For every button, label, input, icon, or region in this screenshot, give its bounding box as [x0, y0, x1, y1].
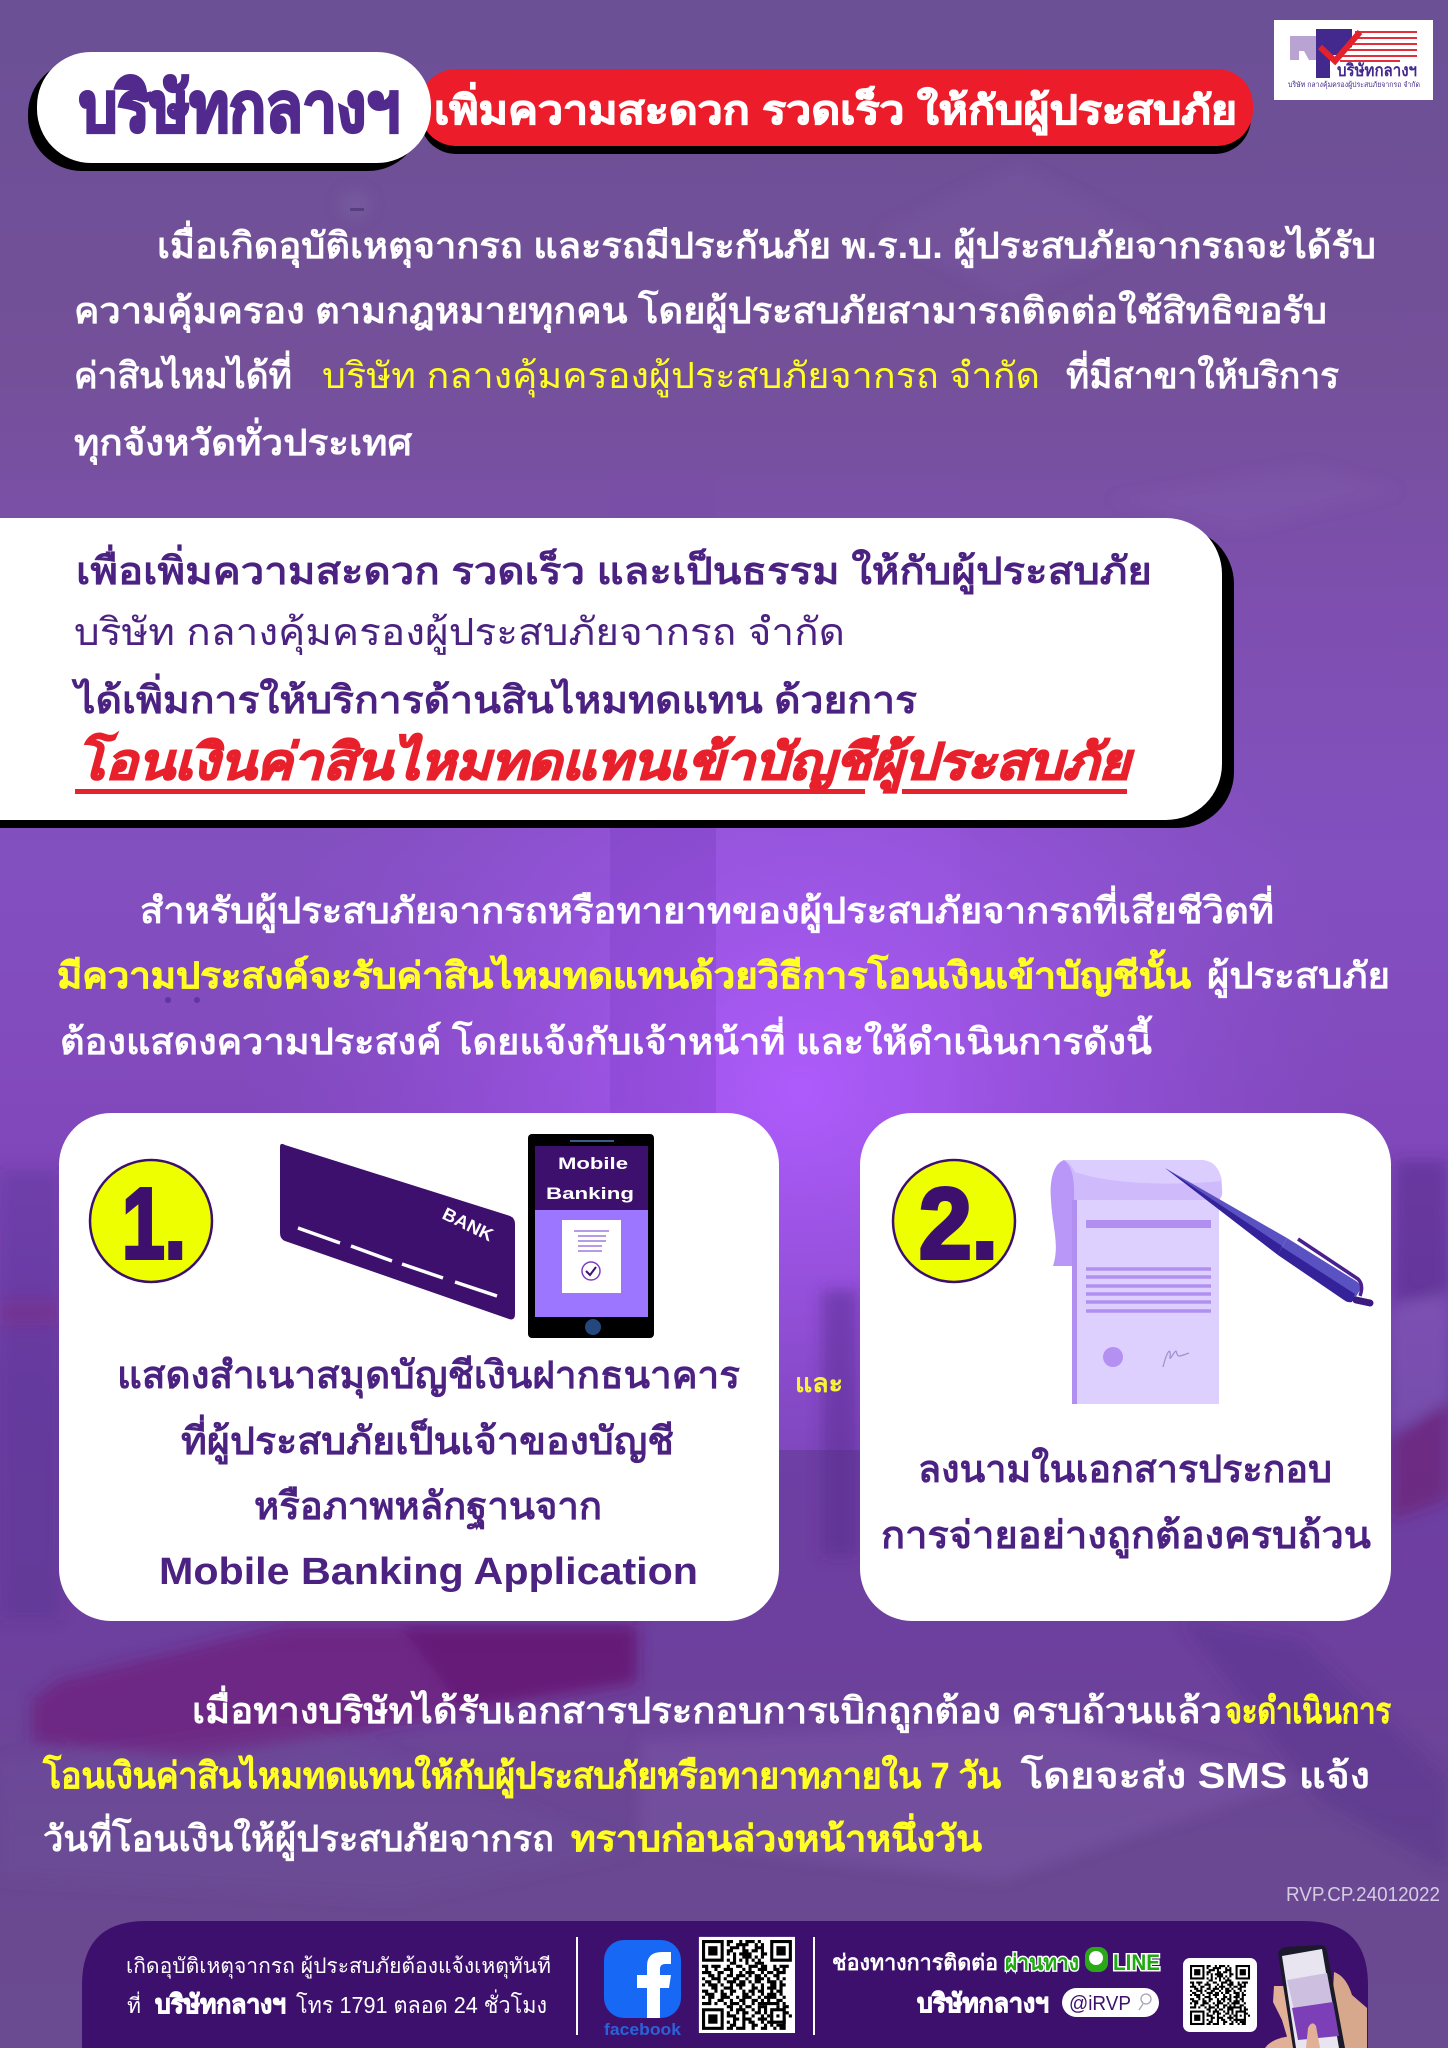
company name: บริษัทกลางฯ: [79, 70, 400, 146]
icon: facebook: facebook: [604, 2020, 682, 2039]
label: and: และ: [795, 1368, 843, 1398]
slogan pill: [420, 69, 1253, 146]
logo: RVP: [1274, 20, 1433, 100]
panel: step 1: [59, 1113, 779, 1621]
step 1 text: หรือภาพหลักฐานจาก: [254, 1486, 602, 1531]
icon: pen: [1165, 1168, 1370, 1303]
footer band: [82, 1921, 1368, 2048]
step 1 text: [117, 1355, 741, 1593]
header: company pill with red slogan pill: [28, 52, 1253, 171]
paragraph: how to request transfer: มีความประสงค์จะรับค่าสินไหมทดแทนด้วยวิธีการโอนเงินเข้าบัญชีนั้น: [57, 949, 1191, 997]
step 2 text: ลงนามในเอกสารประกอบ: [918, 1447, 1332, 1491]
slogan text: เพิ่มความสะดวก รวดเร็ว ให้กับผู้ประสบภัย: [434, 82, 1237, 135]
intro paragraph: ทุกจังหวัดทั่วประเทศ: [74, 417, 413, 466]
paragraph: how to request transfer: ต้องแสดงความประสงค์ โดยแจ้งกับเจ้าหน้าที่ และให้ดำเนินการดังนี้: [60, 1015, 1153, 1062]
logo: RVP: บริษัท กลางคุ้มครองผู้ประสบภัยจากรถ จำกัด: [1288, 80, 1420, 89]
step 1 text: ที่ผู้ประสบภัยเป็นเจ้าของบัญชี: [181, 1414, 674, 1465]
paragraph: transfer timing: เมื่อทางบริษัทได้รับเอกสารประกอบการเบิกถูกต้อง ครบถ้วนแล้ว: [192, 1685, 1222, 1734]
footer contact channels: LINE: [1113, 1950, 1160, 1975]
footer emergency text: โทร 1791 ตลอด 24 ชั่วโมง: [296, 1989, 547, 2018]
reference code: RVP.CP.24012022: [1286, 1884, 1440, 1906]
slogan pill shadow: [420, 77, 1251, 154]
step 2 number badge: [893, 1160, 1015, 1282]
paragraph: transfer timing: โดยจะส่ง SMS แจ้ง: [1020, 1754, 1370, 1796]
step 2 number badge: 2.: [919, 1168, 998, 1280]
footer emergency text: เกิดอุบัติเหตุจากรถ ผู้ประสบภัยต้องแจ้งเหตุทันที: [126, 1955, 551, 1979]
paragraph: how to request transfer: [57, 885, 1390, 1062]
step 1 number badge: [90, 1160, 212, 1282]
QR code: facebook: [699, 1937, 795, 2033]
footer contact channels: @iRVP: [1069, 1993, 1131, 2015]
icon: bank book: [280, 1144, 515, 1319]
paragraph: transfer timing: วันที่โอนเงินให้ผู้ประสบภัยจากรถ: [43, 1813, 554, 1862]
step 1 number badge: 1.: [122, 1168, 186, 1280]
footer contact channels: ช่องทางการติดต่อ: [832, 1950, 998, 1975]
intro paragraph: [74, 220, 1376, 466]
notice line 1: เพื่อเพิ่มความสะดวก รวดเร็ว และเป็นธรรม ให้กับผู้ประสบภัย: [76, 544, 1152, 595]
icon: mobile banking phone: Banking: [546, 1184, 634, 1203]
paragraph: transfer timing: โอนเงินค่าสินไหมทดแทนให้กับผู้ประสบภัยหรือทายาทภายใน 7 วัน: [42, 1754, 1001, 1799]
step 1 text: แสดงสำเนาสมุดบัญชีเงินฝากธนาคาร: [117, 1355, 741, 1399]
panel: faster compensation notice: [0, 518, 1234, 828]
intro paragraph: เมื่อเกิดอุบัติเหตุจากรถ และรถมีประกันภัย พ.ร.บ. ผู้ประสบภัยจากรถจะได้รับ: [157, 220, 1376, 269]
panel: step 2: [860, 1113, 1391, 1621]
footer contact channels: [832, 1947, 1160, 2018]
paragraph: transfer timing: ทราบก่อนล่วงหน้าหนึ่งวัน: [571, 1813, 982, 1859]
icon: mobile banking phone: [528, 1134, 654, 1338]
footer contact channels: ผ่านทาง: [1005, 1950, 1079, 1975]
intro paragraph: ที่มีสาขาให้บริการ: [1066, 350, 1340, 396]
notice highlight line: โอนเงินค่าสินไหมทดแทนเข้าบัญชีผู้ประสบภัย: [76, 732, 1135, 793]
icon: mobile banking phone: Mobile: [558, 1154, 628, 1173]
intro paragraph: ค่าสินไหมได้ที่: [74, 350, 292, 396]
footer emergency text: ที่: [127, 1991, 141, 2018]
QR code: LINE: [1183, 1958, 1257, 2032]
notice line 2: บริษัท กลางคุ้มครองผู้ประสบภัยจากรถ จำกัด: [74, 612, 845, 655]
step 2 text: การจ่ายอย่างถูกต้องครบถ้วน: [881, 1515, 1371, 1559]
paragraph: how to request transfer: สำหรับผู้ประสบภัยจากรถหรือทายาทของผู้ประสบภัยจากรถที่เสียชีวิตที่: [140, 885, 1274, 934]
icon: signed document: [1051, 1160, 1222, 1404]
icon: hand holding phone: [1265, 1945, 1367, 2048]
paragraph: transfer timing: [42, 1685, 1392, 1862]
paragraph: how to request transfer: ผู้ประสบภัย: [1207, 955, 1390, 999]
icon: bank book: BANK: [439, 1204, 497, 1245]
intro paragraph: ความคุ้มครอง ตามกฎหมายทุกคน โดยผู้ประสบภัยสามารถติดต่อใช้สิทธิขอรับ: [74, 289, 1327, 334]
company pill: [37, 52, 431, 163]
icon: facebook: [604, 1940, 682, 2039]
paragraph: transfer timing: จะดำเนินการ: [1225, 1690, 1392, 1731]
logo: RVP: บริษัทกลางฯ: [1337, 61, 1417, 80]
intro paragraph: บริษัท กลางคุ้มครองผู้ประสบภัยจากรถ จำกัด: [322, 355, 1040, 398]
step 2 text: [881, 1447, 1371, 1559]
footer emergency text: [126, 1955, 551, 2019]
step 1 text: Mobile Banking Application: [159, 1551, 698, 1593]
footer emergency text: บริษัทกลางฯ: [155, 1989, 286, 2019]
notice line 3: ได้เพิ่มการให้บริการด้านสินไหมทดแทน ด้วยการ: [71, 673, 918, 722]
footer contact channels: บริษัทกลางฯ: [917, 1988, 1049, 2018]
company pill shadow: [28, 60, 422, 171]
